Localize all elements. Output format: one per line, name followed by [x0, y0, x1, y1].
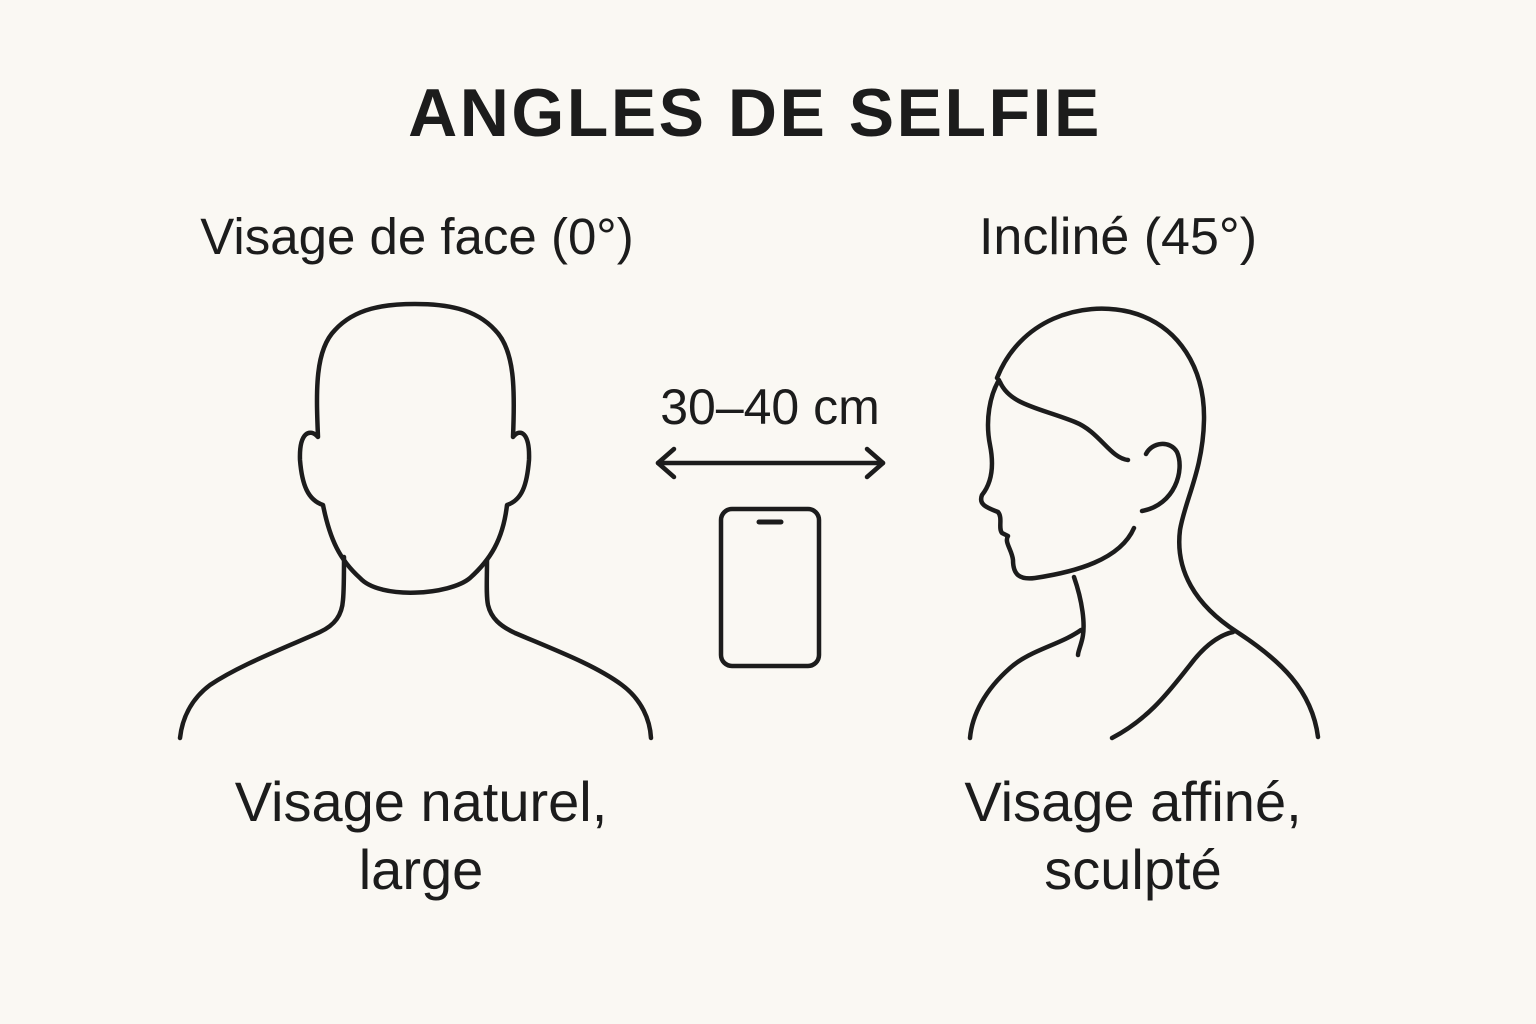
icon: tilted head: [970, 309, 1318, 738]
distance label: 30–40 cm: [660, 379, 880, 435]
caption: tilted: [964, 770, 1302, 901]
title: ANGLES DE SELFIE: [408, 75, 1102, 151]
arrow: distance: [658, 449, 883, 477]
caption: tilted: sculpté: [1044, 838, 1222, 901]
caption: front: Visage naturel,: [235, 770, 607, 833]
heading: tilted: Incliné (45°): [979, 208, 1257, 266]
caption: front: [235, 770, 607, 901]
caption: tilted: Visage affiné,: [964, 770, 1302, 833]
heading: front face: Visage de face (0°): [200, 208, 634, 265]
icon: front head: [180, 304, 651, 738]
icon: phone: [721, 509, 819, 666]
caption: front: large: [359, 838, 483, 901]
